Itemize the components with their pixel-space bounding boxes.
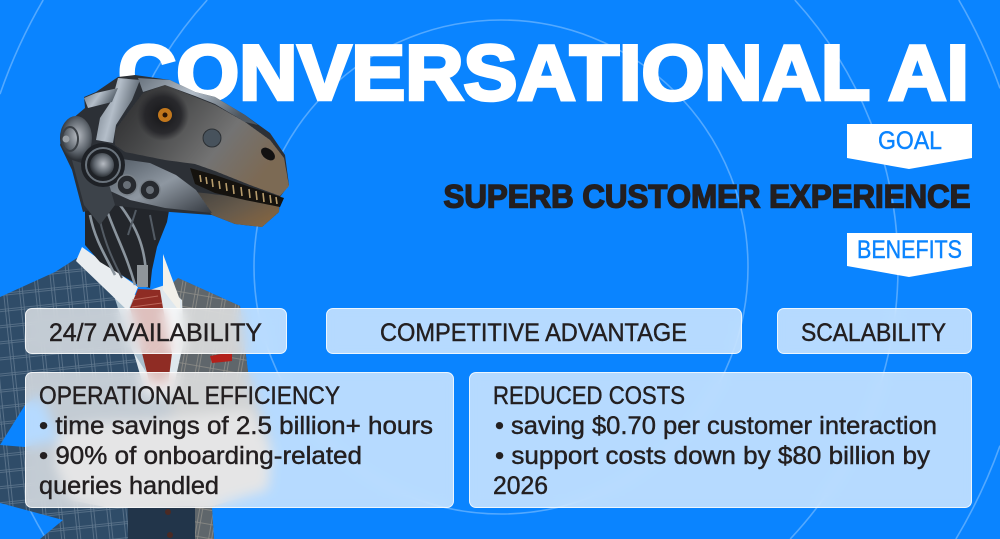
upper snout with scales (115, 85, 289, 196)
panel: scalability (777, 308, 972, 354)
panel: operational efficiency: OPERATIONAL EFFICIENCY (39, 382, 340, 410)
panel: operational efficiency: • time savings of 2.5 billion+ hours (39, 412, 433, 440)
cheek sensor (203, 129, 221, 147)
neck (85, 200, 170, 288)
teeth (190, 168, 284, 207)
panel: reduced costs: REDUCED COSTS (493, 382, 685, 410)
panel: reduced costs: • saving $0.70 per customer interaction (495, 412, 937, 440)
panel: reduced costs: • support costs down by $80 billion by (495, 442, 931, 470)
back of head gear (72, 160, 115, 225)
lower jaw (195, 192, 279, 227)
eye (137, 89, 189, 141)
suit jacket (0, 258, 270, 539)
panel: 24/7 availability: 24/7 AVAILABILITY (49, 319, 262, 347)
hands (55, 410, 272, 508)
panel: competitive advantage (326, 308, 742, 354)
tie (130, 289, 172, 385)
panel: operational efficiency: queries handled (39, 472, 219, 500)
panel: operational efficiency: • 90% of onboarding-related (39, 442, 362, 470)
top metal plating (84, 78, 258, 143)
metal cheek plate (108, 158, 212, 213)
panel: reduced costs: 2026 (493, 472, 548, 500)
pocket square (210, 352, 232, 363)
goal statement: SUPERB CUSTOMER EXPERIENCE (444, 178, 970, 214)
benefits banner: BENEFITS (857, 236, 962, 264)
nostril (259, 145, 277, 163)
goal banner: GOAL (878, 127, 942, 155)
joint disc (81, 143, 125, 187)
panel: competitive advantage: COMPETITIVE ADVANTAGE (380, 319, 687, 347)
panel: reduced costs (469, 372, 972, 508)
head (60, 75, 289, 227)
panel: scalability: SCALABILITY (801, 319, 946, 347)
panel: 24/7 availability (25, 308, 287, 354)
panel: operational efficiency (25, 372, 454, 508)
ear disc (60, 116, 92, 160)
title: CONVERSATIONAL AI (118, 28, 969, 116)
shirt and collar (76, 247, 184, 395)
small rings (117, 175, 160, 200)
